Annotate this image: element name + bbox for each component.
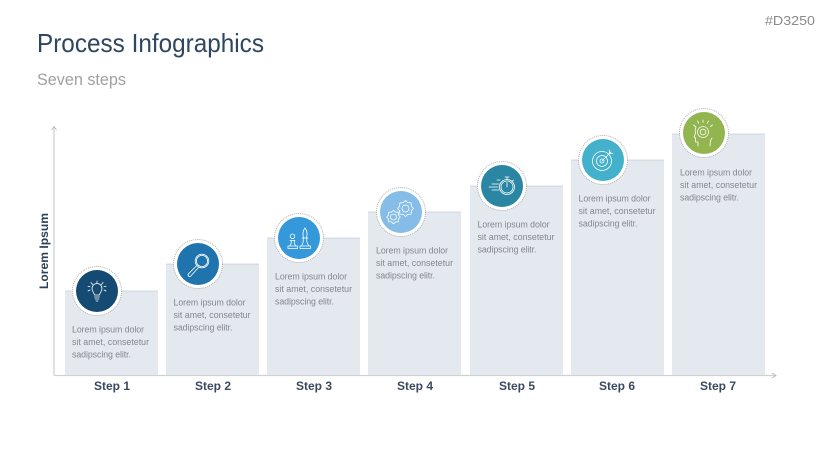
bar: step 3 [267, 238, 360, 375]
label: step 4: Step 4 [397, 379, 433, 393]
description: step 6 [578, 194, 656, 228]
icon: light bulb [72, 266, 122, 316]
icon: gears [376, 188, 426, 236]
description: step 4 [376, 246, 453, 280]
description: step 2 [174, 298, 251, 332]
description: step 2: sit amet, consetetur [174, 310, 251, 320]
icon: target [578, 136, 628, 184]
description: step 6: sit amet, consetetur [578, 206, 656, 216]
y axis label: Lorem Ipsum [37, 213, 51, 289]
description: step 2: sadipscing elitr. [174, 322, 232, 332]
description: step 5 [478, 220, 555, 254]
bar: step 1 [65, 291, 158, 375]
label: step 7: Step 7 [700, 379, 736, 393]
step 1 [65, 266, 158, 393]
label: step 5: Step 5 [499, 379, 535, 393]
description: step 5: sadipscing elitr. [478, 244, 536, 254]
icon: magnifying glass [174, 240, 222, 288]
label: step 1: Step 1 [94, 379, 130, 393]
description: step 2: Lorem ipsum dolor [174, 298, 246, 308]
bar: step 2 [166, 264, 259, 375]
description: step 7: Lorem ipsum dolor [680, 168, 752, 178]
description: step 5: Lorem ipsum dolor [478, 220, 550, 230]
description: step 4: Lorem ipsum dolor [376, 246, 448, 256]
step 6 [571, 136, 664, 393]
icon: chess pieces [274, 214, 324, 262]
bar: step 4 [368, 212, 461, 375]
subtitle: Seven steps [37, 70, 126, 89]
description: step 1: sit amet, consetetur [72, 337, 149, 347]
bar: step 7 [672, 134, 765, 375]
description: step 3: Lorem ipsum dolor [275, 272, 347, 282]
description: step 4: sadipscing elitr. [376, 270, 435, 280]
label: step 2: Step 2 [195, 379, 231, 393]
title: Process Infographics [37, 28, 264, 58]
step 7 [672, 108, 765, 393]
description: step 6: sadipscing elitr. [578, 218, 638, 228]
step 5 [470, 162, 563, 393]
description: step 7: sit amet, consetetur [680, 180, 757, 190]
icon: stopwatch [478, 162, 526, 210]
step 2 [166, 240, 259, 393]
document code: #D3250 [765, 14, 815, 28]
description: step 7 [680, 168, 757, 202]
description: step 4: sit amet, consetetur [376, 258, 453, 268]
bar: step 5 [470, 186, 563, 375]
icon: head with brain [680, 108, 728, 158]
label: step 6: Step 6 [599, 379, 635, 393]
description: step 7: sadipscing elitr. [680, 192, 739, 202]
description: step 5: sit amet, consetetur [478, 232, 555, 242]
chart axes [52, 126, 776, 378]
description: step 1 [72, 324, 149, 360]
description: step 1: sadipscing elitr. [72, 350, 131, 360]
description: step 3: sadipscing elitr. [275, 296, 334, 306]
label: step 3: Step 3 [296, 379, 332, 393]
description: step 1: Lorem ipsum dolor [72, 324, 144, 334]
description: step 3: sit amet, consetetur [275, 284, 352, 294]
description: step 3 [275, 272, 352, 306]
step 3 [267, 214, 360, 393]
step 4 [368, 188, 461, 393]
bar: step 6 [571, 160, 664, 375]
description: step 6: Lorem ipsum dolor [578, 194, 651, 204]
